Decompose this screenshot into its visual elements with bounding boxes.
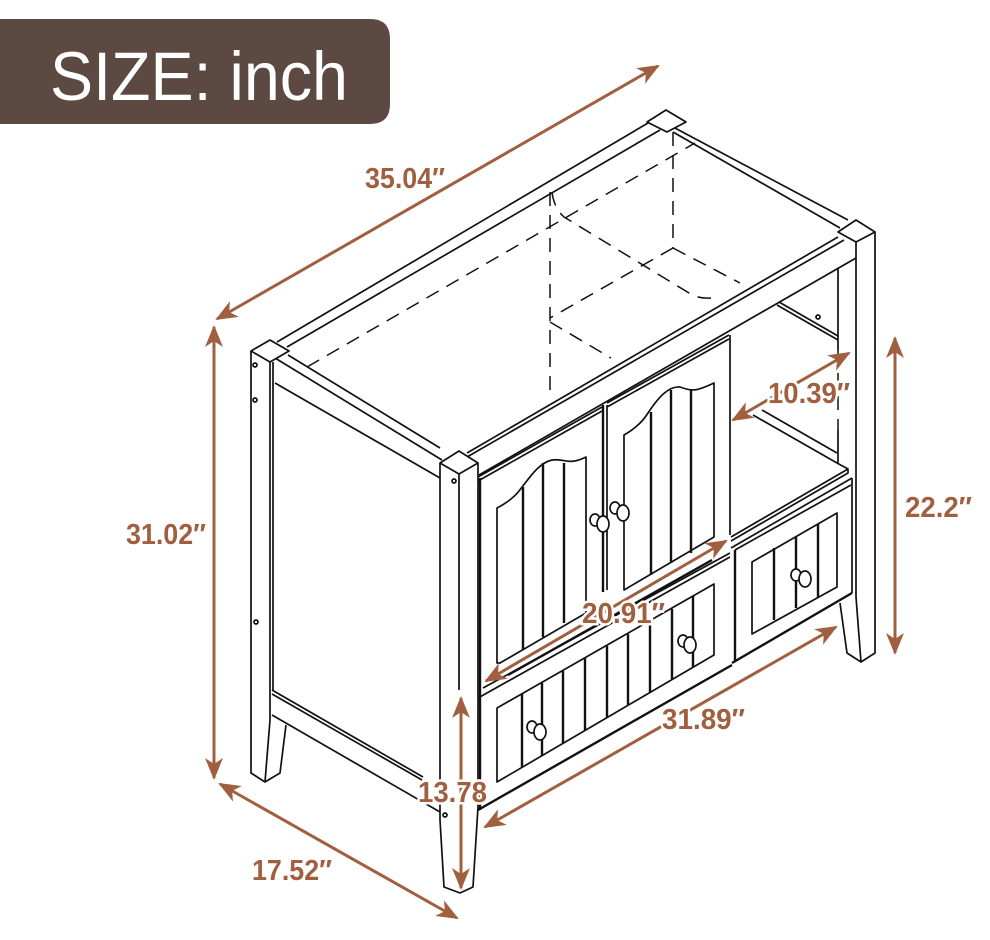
label: 31.89: 31.89″ (662, 704, 745, 736)
label: 13.78: 13.78 (418, 777, 487, 809)
arrow: 31.02 height (212, 327, 216, 778)
title badge: SIZE: inch: SIZE: inch (50, 38, 348, 115)
label: 35.04: 35.04″ (365, 163, 445, 195)
title badge: SIZE: inch (0, 19, 390, 124)
small drawer (731, 463, 852, 663)
label: 20.91: 20.91″ (582, 598, 665, 630)
hidden interior dashed lines (307, 132, 740, 398)
label: 10.39: 10.39″ (768, 378, 850, 410)
open shelf (753, 302, 838, 463)
arrow: 35.04 width (217, 66, 658, 319)
cabinet line drawing (251, 110, 875, 893)
rear left post and leg (251, 340, 289, 782)
arrow: 17.52 depth (220, 784, 457, 918)
arrow: 10.39 opening width (733, 353, 849, 420)
front left post and leg (440, 451, 478, 893)
left door (497, 457, 609, 663)
label: 17.52: 17.52″ (252, 855, 332, 887)
arrow: 22.2 opening height (894, 338, 896, 653)
label: 31.02: 31.02″ (126, 519, 206, 551)
label: 22.2: 22.2″ (905, 492, 972, 524)
far back cap (647, 110, 686, 132)
cabinet front frame (478, 335, 730, 810)
side bottom rail (272, 690, 440, 812)
long drawer (478, 553, 732, 810)
top frame rails (275, 123, 856, 478)
right post and leg (838, 220, 875, 662)
arrow: 13.78 leg height (460, 698, 462, 888)
arrow: 20.91 door width (486, 541, 726, 681)
right door (610, 383, 714, 590)
arrow: 31.89 front width (485, 627, 836, 827)
